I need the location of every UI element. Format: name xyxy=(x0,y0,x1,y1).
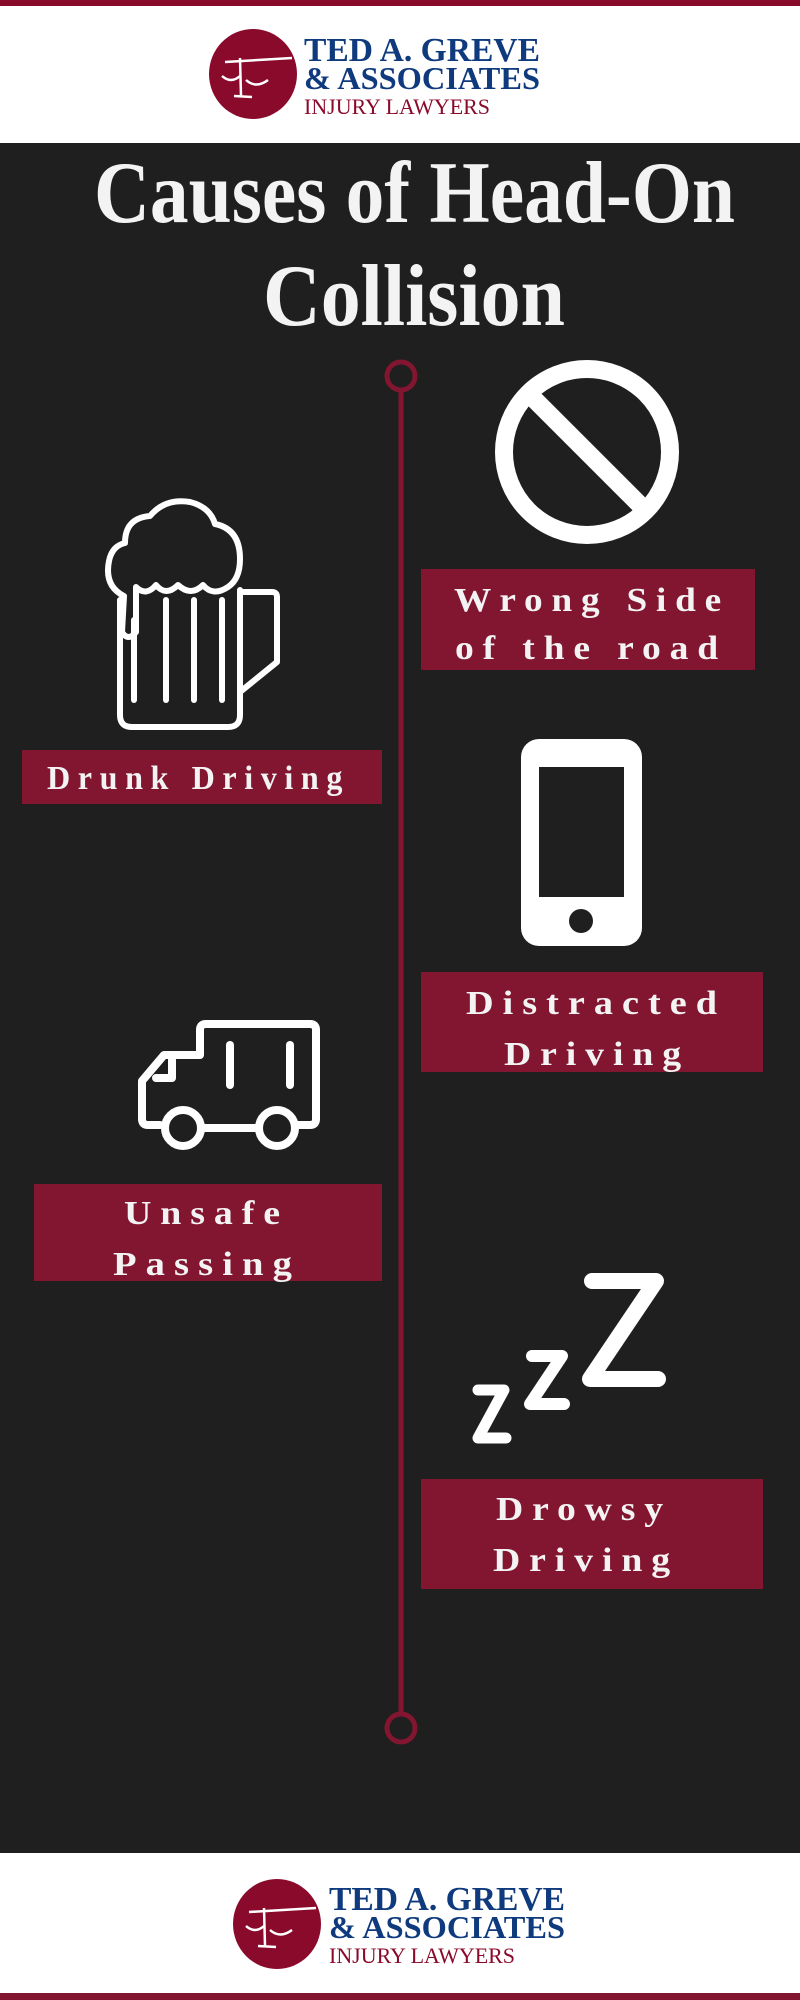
icon: zzz xyxy=(478,1281,658,1438)
label: drowsy driving: Drowsy xyxy=(496,1491,672,1528)
label: drowsy driving xyxy=(421,1479,763,1589)
logo: footer: INJURY LAWYERS xyxy=(329,1943,515,1968)
header band xyxy=(0,0,800,143)
title xyxy=(94,145,735,345)
timeline xyxy=(387,362,415,1742)
logo: header: & ASSOCIATES xyxy=(304,60,540,96)
label: drunk driving xyxy=(22,750,382,804)
logo: footer: TED A. GREVE xyxy=(329,1881,565,1918)
label: wrong side of the road: of the road xyxy=(455,630,727,667)
logo: footer: & ASSOCIATES xyxy=(329,1909,565,1945)
label: wrong side of the road xyxy=(421,569,755,670)
label: distracted driving: Distracted xyxy=(466,985,726,1022)
footer band xyxy=(0,1853,800,2000)
label: unsafe passing: Unsafe xyxy=(124,1195,289,1232)
label: distracted driving xyxy=(421,972,763,1073)
icon: beer mug xyxy=(108,501,277,727)
label: drowsy driving: Driving xyxy=(493,1542,679,1579)
logo: footer xyxy=(233,1879,565,1969)
title: Collision xyxy=(263,248,565,345)
label: unsafe passing: Passing xyxy=(113,1246,301,1283)
icon: truck xyxy=(142,1024,316,1146)
logo: header: TED A. GREVE xyxy=(304,32,540,69)
label: distracted driving: Driving xyxy=(504,1036,690,1073)
label: drunk driving: Drunk Driving xyxy=(47,760,350,797)
logo: header: INJURY LAWYERS xyxy=(304,94,490,119)
label: wrong side of the road: Wrong Side xyxy=(454,582,730,619)
icon: no sign xyxy=(504,369,670,535)
logo: header xyxy=(209,29,540,119)
label: unsafe passing xyxy=(34,1184,382,1283)
icon: phone xyxy=(521,739,642,946)
